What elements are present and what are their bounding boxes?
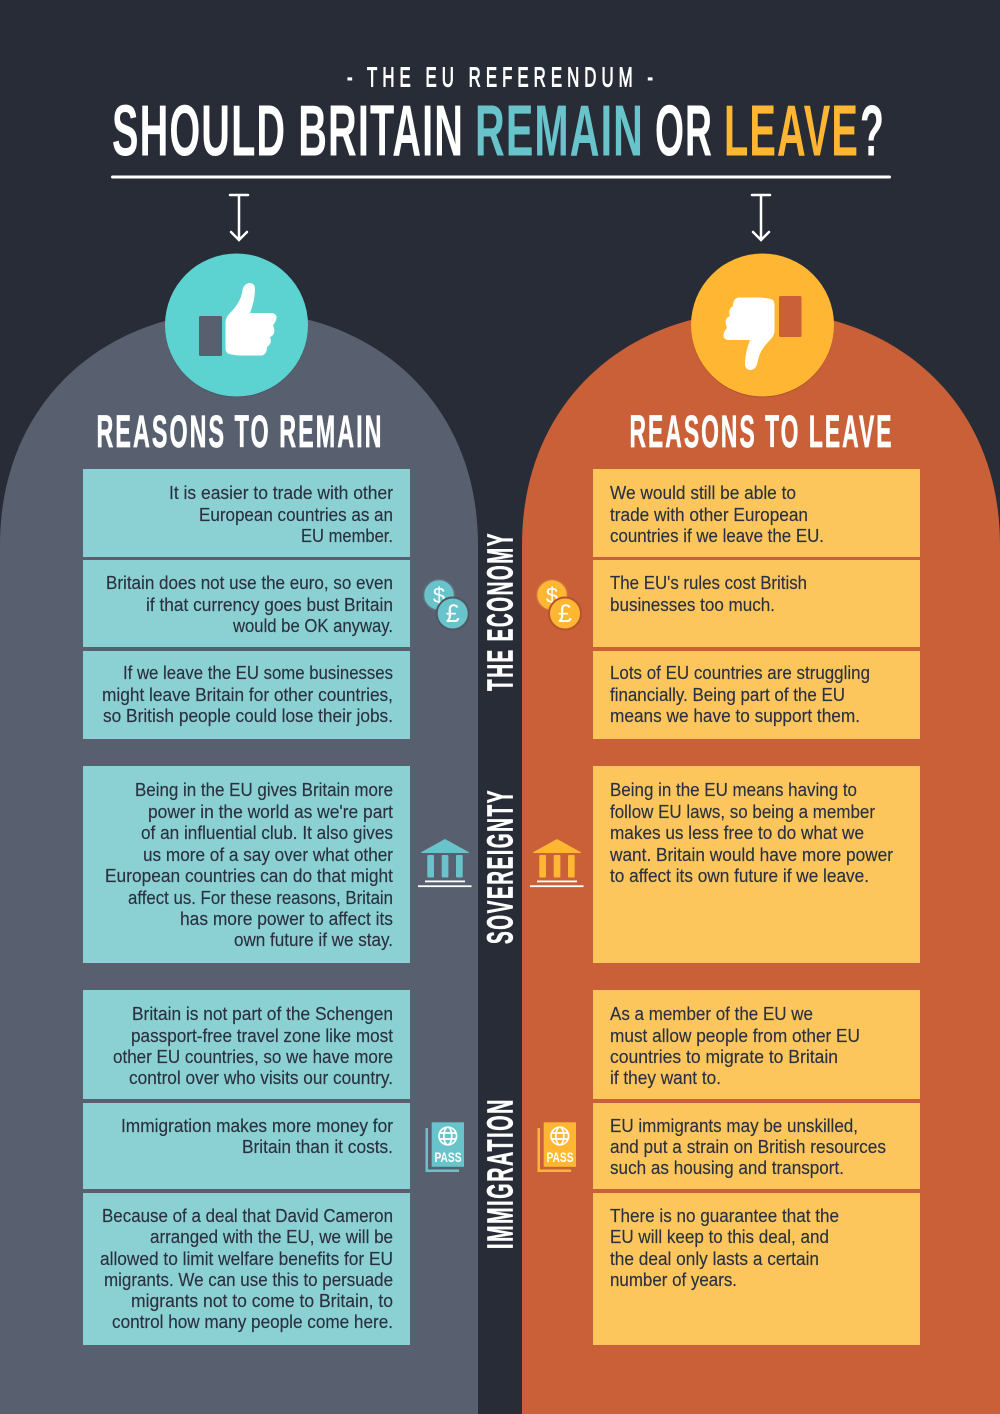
panel: leave immigration 2 xyxy=(593,1103,920,1189)
icon: passport remain: PASS xyxy=(434,1150,462,1165)
icon: temple leave xyxy=(530,840,584,887)
panel: leave economy 1: We would still be able to xyxy=(610,483,796,503)
panel: remain sovereignty: European countries can do that might xyxy=(105,866,393,886)
panel: leave economy 3: means we have to support them. xyxy=(610,706,860,726)
panel: remain immigration 1 xyxy=(83,990,410,1099)
panel: leave sovereignty: Being in the EU means having to xyxy=(610,780,857,800)
panel: remain economy 1: European countries as an xyxy=(199,505,393,525)
panel: leave immigration 1: As a member of the EU we xyxy=(610,1004,813,1024)
panel: remain economy 2: if that currency goes bust Britain xyxy=(146,595,393,615)
main heading: OR xyxy=(655,92,713,172)
panel: leave immigration 3: number of years. xyxy=(610,1270,737,1290)
icon: coins remain: £ xyxy=(446,600,460,628)
panel: leave economy 2 xyxy=(593,560,920,647)
panel: remain sovereignty: has more power to affect its xyxy=(180,909,393,929)
panel: remain economy 3 xyxy=(83,651,410,739)
kicker: - THE EU REFERENDUM - xyxy=(347,61,653,93)
section label: sovereignty: SOVEREIGNTY xyxy=(480,789,520,944)
panel: remain immigration 3: migrants not to come to Britain, to xyxy=(131,1291,393,1311)
panel: remain immigration 2: Britain than it costs. xyxy=(242,1137,393,1157)
icon: coins remain xyxy=(424,580,469,630)
main heading: REMAIN xyxy=(475,92,644,172)
arrow: leave xyxy=(752,195,770,240)
panel: remain immigration 1: passport-free travel zone like most xyxy=(131,1026,393,1046)
panel: leave immigration 1 xyxy=(593,990,920,1099)
main heading: SHOULD BRITAIN xyxy=(112,92,464,172)
panel: remain economy 3: might leave Britain for other countries, xyxy=(102,685,393,705)
panel: remain immigration 3: arranged with the EU, we will be xyxy=(150,1227,393,1247)
panel: remain immigration 2: Immigration makes more money for xyxy=(121,1116,393,1136)
panel: leave immigration 3: There is no guarantee that the xyxy=(610,1206,839,1226)
panel: leave economy 3: financially. Being part of the EU xyxy=(610,685,845,705)
panel: leave economy 3: Lots of EU countries are struggling xyxy=(610,663,870,683)
panel: remain sovereignty: of an influential club. It also gives xyxy=(141,823,393,843)
panel: remain immigration 3 xyxy=(83,1193,410,1345)
panel: remain sovereignty: power in the world as we're part xyxy=(148,802,393,822)
panel: leave sovereignty: want. Britain would have more power xyxy=(609,845,893,865)
panel: remain immigration 2 xyxy=(83,1103,410,1189)
main heading: LEAVE xyxy=(724,92,859,172)
panel: leave economy 2: businesses too much. xyxy=(610,595,775,615)
panel: remain immigration 1: other EU countries, so we have more xyxy=(113,1047,393,1067)
arrow: remain xyxy=(230,195,248,240)
panel: leave economy 1 xyxy=(593,469,920,557)
panel: leave economy 1: countries if we leave the EU. xyxy=(610,526,824,546)
panel: remain sovereignty: Being in the EU gives Britain more xyxy=(135,780,393,800)
section label: the economy: THE ECONOMY xyxy=(480,532,520,691)
panel: remain arch background xyxy=(0,311,478,1414)
panel: remain immigration 1: Britain is not part of the Schengen xyxy=(132,1004,393,1024)
panel: leave immigration 3 xyxy=(593,1193,920,1345)
heading: reasons to remain: REASONS TO REMAIN xyxy=(96,406,384,457)
icon: coins remain: $ xyxy=(433,583,445,608)
panel: leave sovereignty: makes us less free to do what we xyxy=(610,823,864,843)
panel: leave immigration 3: the deal only lasts a certain xyxy=(610,1249,819,1269)
panel: remain economy 2: would be OK anyway. xyxy=(232,616,393,636)
panel: remain immigration 3: migrants. We can use this to persuade xyxy=(104,1270,393,1290)
icon: temple remain xyxy=(418,840,472,887)
panel: remain economy 2: Britain does not use the euro, so even xyxy=(106,573,393,593)
icon: passport leave: PASS xyxy=(546,1150,574,1165)
panel: leave immigration 1: countries to migrate to Britain xyxy=(610,1047,838,1067)
panel: leave economy 1: trade with other European xyxy=(610,505,808,525)
panel: leave economy 3 xyxy=(593,651,920,739)
panel: leave immigration 1: must allow people from other EU xyxy=(610,1026,860,1046)
panel: leave immigration 1: if they want to. xyxy=(610,1068,721,1088)
icon: coins leave xyxy=(536,580,581,630)
panel: remain immigration 3: Because of a deal that David Cameron xyxy=(102,1206,393,1226)
panel: leave immigration 2: and put a strain on British resources xyxy=(610,1137,886,1157)
panel: remain economy 3: so British people could lose their jobs. xyxy=(103,706,393,726)
panel: remain economy 1 xyxy=(83,469,410,557)
panel: remain economy 1: It is easier to trade with other xyxy=(169,483,393,503)
icon: coins leave: £ xyxy=(558,600,572,628)
icon: thumbs up xyxy=(165,254,308,398)
panel: leave sovereignty: follow EU laws, so being a member xyxy=(610,802,875,822)
panel: leave sovereignty xyxy=(593,766,920,963)
panel: leave economy 2: The EU's rules cost British xyxy=(610,573,807,593)
title block xyxy=(111,61,891,178)
section label: immigration: IMMIGRATION xyxy=(480,1098,520,1249)
panel: remain economy 1: EU member. xyxy=(301,526,393,546)
panel: leave arch background xyxy=(522,311,1000,1414)
icon: thumbs down xyxy=(691,254,834,398)
icon: passport leave xyxy=(538,1122,576,1172)
panel: remain sovereignty: affect us. For these reasons, Britain xyxy=(128,888,393,908)
panel: remain sovereignty: own future if we stay. xyxy=(234,930,393,950)
panel: remain economy 2 xyxy=(83,560,410,647)
icon: coins leave: $ xyxy=(546,583,558,608)
icon: passport remain xyxy=(426,1122,464,1172)
panel: leave immigration 2: such as housing and transport. xyxy=(610,1158,844,1178)
panel: remain immigration 1: control over who visits our country. xyxy=(129,1068,393,1088)
title rule xyxy=(111,176,891,178)
panel: leave immigration 3: EU will keep to this deal, and xyxy=(610,1227,829,1247)
panel: leave sovereignty: to affect its own future if we leave. xyxy=(610,866,869,886)
panel: remain immigration 3: allowed to limit welfare benefits for EU xyxy=(100,1249,393,1269)
panel: remain immigration 3: control how many people come here. xyxy=(112,1312,393,1332)
panel: leave immigration 2: EU immigrants may be unskilled, xyxy=(610,1116,858,1136)
panel: remain sovereignty xyxy=(83,766,410,963)
panel: remain economy 3: If we leave the EU some businesses xyxy=(123,663,393,683)
panel: remain sovereignty: us more of a say over what other xyxy=(143,845,393,865)
main heading: ? xyxy=(860,92,885,172)
